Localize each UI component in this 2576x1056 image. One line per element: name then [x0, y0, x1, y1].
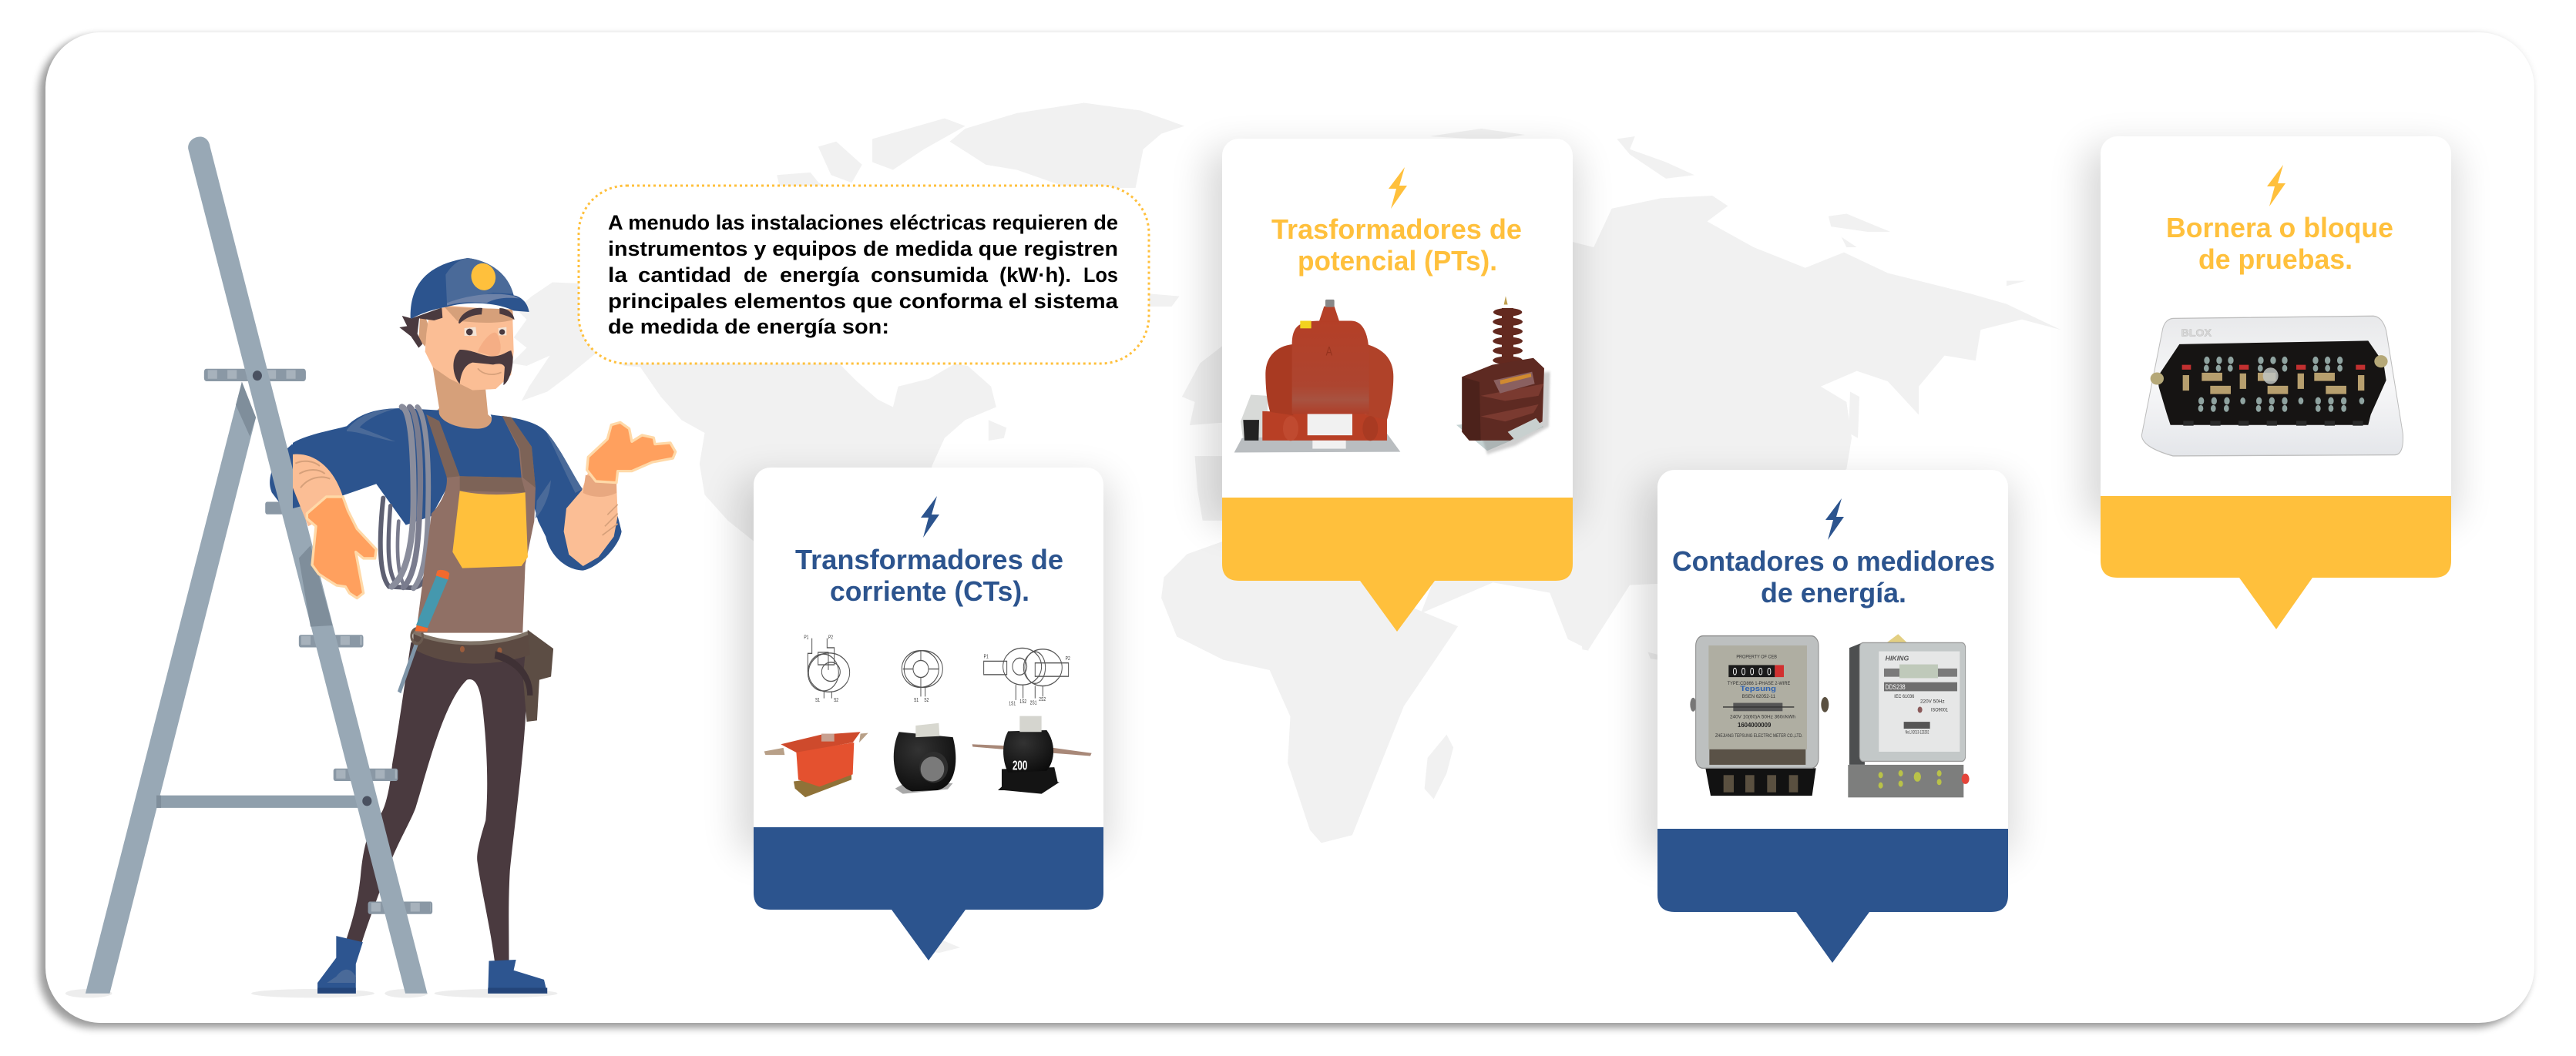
heading: Trasformadores de	[1271, 213, 1522, 245]
callout: intro speech bubble	[579, 186, 1149, 364]
images: energy meters: IEC 61036	[1894, 694, 1915, 699]
photo: red potential transformer	[1241, 394, 1268, 441]
diagram 2: S2	[924, 699, 929, 704]
icon: lightning bolt	[1825, 498, 1844, 540]
images: energy meters: HIKING	[1886, 655, 1909, 662]
neck	[433, 367, 495, 430]
image: test terminal block	[2141, 316, 2403, 456]
intro text: Los	[1083, 263, 1118, 287]
panel: Transformadores de potencial	[1207, 139, 1578, 632]
ground shadows	[65, 989, 558, 997]
images: energy meters: No.LX2013-123292	[1906, 730, 1929, 736]
cap	[411, 258, 529, 318]
image: test terminal block: BLOX	[2181, 328, 2212, 339]
heading: potencial (PTs).	[1298, 245, 1497, 277]
diagram 3	[984, 648, 1070, 707]
world map background	[511, 102, 2060, 953]
apron pocket	[452, 491, 528, 568]
intro text: instrumentos y equipos de medida que registren	[608, 237, 1118, 260]
diagram 2: S1	[914, 699, 919, 704]
diagram 3: P1	[984, 655, 989, 660]
diagram 1: P2	[828, 635, 834, 641]
diagram 1: S1	[815, 699, 821, 704]
head	[418, 317, 428, 347]
left sleeve behind rail	[270, 444, 308, 511]
belt and pouch	[523, 630, 553, 722]
diagram 1: P1	[804, 635, 809, 641]
card footer with pointer	[1657, 829, 2008, 963]
panel: Transformadores de corriente	[738, 468, 1110, 960]
photo: analog meter	[1705, 768, 1816, 796]
images: energy meters: TYPE:CD866 1-PHASE 2-WIRE	[1728, 681, 1790, 686]
images: energy meters	[1690, 634, 1970, 797]
images: current transformer diagrams and photos: 200	[1013, 758, 1027, 773]
ladder	[86, 136, 432, 994]
shirt	[293, 408, 622, 571]
images: energy meters: BSEN 62052-11	[1742, 694, 1775, 699]
panel: Bornera o bloque de pruebas	[2085, 136, 2457, 629]
intro text: A menudo las instalaciones eléctricas requieren de	[608, 211, 1118, 234]
images: energy meters: PROPERTY OF CEB	[1736, 655, 1777, 660]
images: energy meters: 00000	[1733, 665, 1772, 678]
upper body	[293, 258, 676, 633]
images: energy meters: ZHEJIANG TEPSUNG ELECTRIC METER CO.,LTD.	[1715, 734, 1803, 739]
diagram 3: P2	[1066, 656, 1070, 662]
intro text: energía	[780, 263, 860, 287]
heading: Transformadores de	[795, 544, 1063, 575]
hair	[399, 307, 442, 348]
diagram 2	[902, 651, 942, 704]
left glove	[307, 497, 376, 598]
images: energy meters: DDS238	[1886, 683, 1906, 691]
icon: lightning bolt	[921, 496, 939, 538]
diagram 3: 2S2	[1039, 697, 1046, 702]
card footer with pointer	[2101, 496, 2451, 629]
screwdriver shaft	[399, 642, 417, 692]
photo: black ring transformer	[895, 783, 953, 794]
icon: lightning bolt	[2267, 165, 2285, 206]
images: energy meters: 240V 10(60)A 50Hz 360r/kWh	[1730, 715, 1795, 720]
illustration: electrician and ladder	[65, 136, 676, 997]
eyes	[465, 327, 506, 336]
images: energy meters: Tepsung	[1740, 685, 1776, 692]
intro text	[608, 211, 1119, 338]
images: potential transformers: A	[1326, 344, 1332, 359]
images: energy meters: 1604000009	[1738, 721, 1771, 729]
diagram 1	[804, 635, 850, 704]
heading	[795, 544, 1063, 607]
intro text: la	[608, 263, 628, 287]
right glove	[587, 422, 676, 483]
diagram 1: S2	[834, 699, 839, 704]
diagram 3: 1S1	[1009, 702, 1016, 707]
panel: Contadores o medidores de energía	[1642, 470, 2013, 963]
right forearm	[564, 472, 618, 566]
diagram 3: 2S1	[1030, 701, 1037, 706]
photo: red transformer	[764, 733, 868, 755]
heading: corriente (CTs).	[830, 575, 1029, 607]
heading	[2166, 212, 2393, 275]
rope coil	[381, 407, 428, 588]
heading: Contadores o medidores	[1672, 545, 1995, 577]
eyebrows	[458, 308, 515, 324]
heading	[1271, 213, 1522, 277]
intro text: de medida de energía son:	[608, 315, 889, 338]
moustache	[453, 350, 513, 385]
card footer with pointer	[1222, 498, 1573, 632]
heading: Bornera o bloque	[2166, 212, 2393, 243]
images: potential transformers	[1234, 296, 1550, 454]
photo: black transformer with rating	[972, 744, 1092, 756]
icon: lightning bolt	[1389, 167, 1407, 209]
legs and boots	[317, 629, 553, 994]
intro text: principales elementos que conforma el sistema	[608, 290, 1119, 313]
card footer with pointer	[754, 827, 1103, 960]
photo: brown potential transformer	[1456, 418, 1543, 451]
heading: de energía.	[1761, 577, 1906, 608]
apron	[416, 414, 536, 633]
images: energy meters: ISO9001	[1931, 708, 1948, 713]
diagram 3: 1S2	[1019, 699, 1027, 705]
screwdriver handle	[416, 575, 448, 628]
images: current transformer diagrams and photos	[764, 635, 1092, 797]
photo: digital meter	[1886, 634, 1907, 642]
images: energy meters: 220V 50Hz	[1920, 699, 1945, 705]
heading: de pruebas.	[2198, 243, 2353, 275]
intro text: consumida	[871, 263, 989, 287]
intro text: cantidad	[638, 263, 731, 287]
left forearm	[293, 454, 347, 526]
intro text: de	[744, 263, 767, 287]
intro text: (kW·h).	[999, 263, 1071, 287]
heading	[1672, 545, 1995, 608]
